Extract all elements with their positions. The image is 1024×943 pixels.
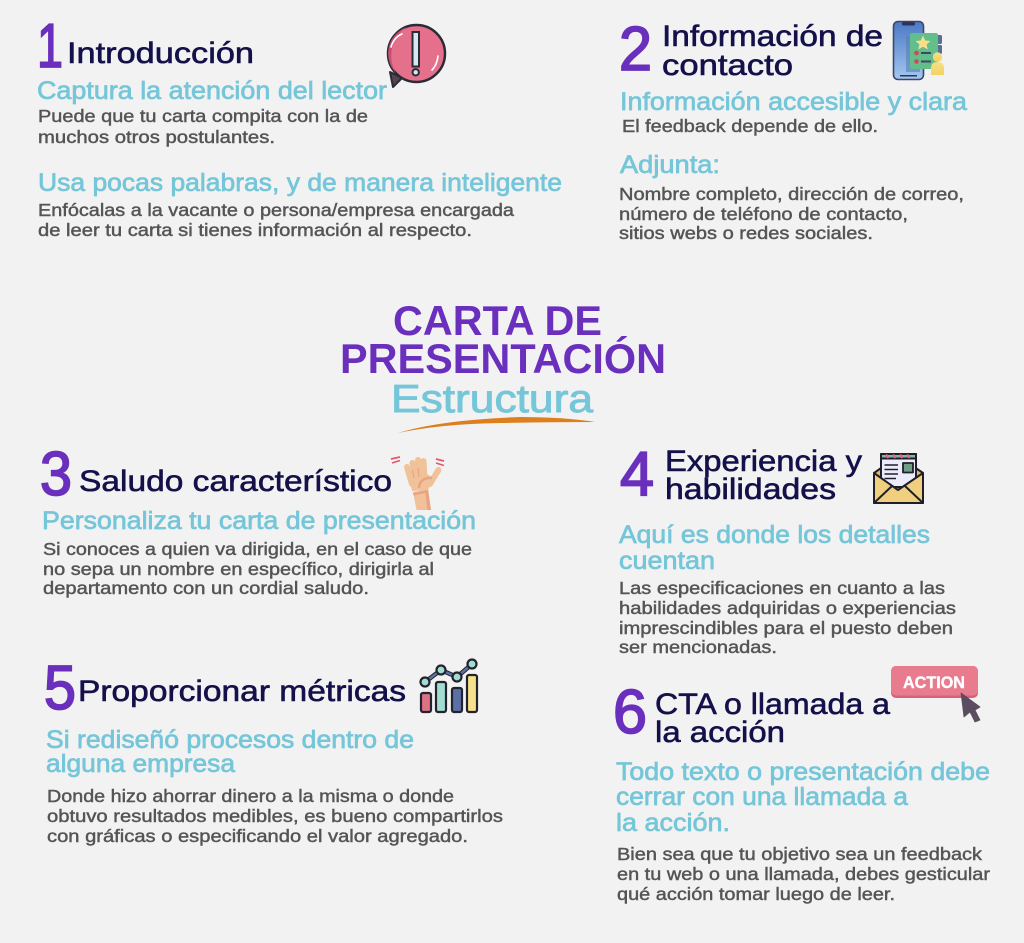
- number 4: 4: [620, 440, 654, 509]
- text block: captura: Puede que tu carta compita con la de: [38, 106, 368, 126]
- heading: información de contacto: [662, 20, 883, 82]
- panel: 3 saludo característico: [40, 440, 476, 598]
- subheading: detalles: [619, 521, 930, 575]
- heading: saludo característico: Saludo característico: [79, 465, 392, 498]
- number 3: 3: [40, 440, 72, 509]
- icon: alert speech bubble: [388, 25, 445, 87]
- text block: resultados: con gráficas o especificando el valor agregado.: [47, 826, 468, 846]
- subheading: captura la atención: Captura la atención del lector: [37, 77, 387, 105]
- orange swoosh: [398, 417, 595, 433]
- panel: 1 introducción: [37, 12, 562, 240]
- text block: captura: [38, 106, 368, 147]
- subheading: todo texto: [616, 758, 990, 837]
- text block: saludo: [43, 539, 472, 598]
- title: carta de presentación: PRESENTACIÓN: [340, 334, 666, 382]
- icon: open envelope: [874, 454, 923, 503]
- heading: cta: [655, 688, 890, 749]
- heading: experiencia y habilidades: habilidades: [665, 473, 836, 506]
- icon: bar and line chart: [420, 660, 477, 712]
- text block: datos de contacto: [619, 184, 964, 243]
- text block: enfócalas: Enfócalas a la vacante o persona/empresa encargada: [38, 200, 514, 220]
- text block: objetivo: qué acción tomar luego de leer.: [617, 884, 895, 904]
- heading: información de contacto: contacto: [662, 49, 793, 82]
- text block: especificaciones: ser mencionadas.: [619, 637, 777, 657]
- text block: resultados: [47, 786, 503, 846]
- text block: saludo: no sepa un nombre en específico, dirigirla al: [43, 559, 434, 579]
- number 2: 2: [619, 15, 652, 84]
- title block: [340, 297, 666, 433]
- subtitle: estructura: Estructura: [391, 378, 593, 421]
- icon: action button with cursor: ACTION: [903, 673, 965, 692]
- subheading: usa pocas palabras: Usa pocas palabras, y de manera inteligente: [38, 169, 562, 197]
- text block: especificaciones: habilidades adquiridas o experiencias: [619, 598, 956, 618]
- subheading: todo texto: cerrar con una llamada a: [616, 783, 908, 811]
- number 5: 5: [44, 654, 76, 723]
- subheading: detalles: Aquí es donde los detalles: [619, 521, 930, 549]
- text block: especificaciones: [619, 578, 956, 657]
- subheading: información accesible: Información accesible y clara: [620, 88, 967, 116]
- text block: saludo: Si conoces a quien va dirigida, en el caso de que: [43, 539, 472, 559]
- text block: objetivo: [617, 844, 990, 904]
- subheading: si rediseñó: alguna empresa: [46, 750, 235, 778]
- text block: datos de contacto: número de teléfono de contacto,: [619, 204, 908, 224]
- heading: cta: la acción: [655, 716, 785, 749]
- text block: objetivo: Bien sea que tu objetivo sea un feedback: [617, 844, 982, 864]
- panel: 5 proporcionar métricas: [44, 654, 503, 846]
- number 6: 6: [613, 678, 647, 747]
- subheading: todo texto: Todo texto o presentación debe: [616, 758, 990, 786]
- panel: 4 experiencia y habilidades: [619, 440, 956, 657]
- text block: especificaciones: Las especificaciones en cuanto a las: [619, 578, 945, 598]
- heading: información de contacto: Información de: [662, 20, 883, 53]
- text block: captura: muchos otros postulantes.: [38, 127, 275, 147]
- icon: phone with contact card: [894, 22, 944, 80]
- text block: resultados: Donde hizo ahorrar dinero a la misma o donde: [47, 786, 454, 806]
- text block: objetivo: en tu web o una llamada, debes gesticular: [617, 864, 990, 884]
- icon: action button with cursor: [891, 666, 980, 722]
- heading: cta: CTA o llamada a: [655, 688, 890, 721]
- number 1: 1: [37, 12, 63, 81]
- heading: proporcionar métricas: Proporcionar métricas: [78, 675, 406, 708]
- text block: especificaciones: imprescindibles para el puesto deben: [619, 618, 953, 638]
- heading: introducción: Introducción: [67, 37, 254, 70]
- text block: enfócalas: [38, 200, 514, 240]
- subheading: detalles: cuentan: [619, 547, 715, 575]
- text block: feedback: El feedback depende de ello.: [622, 116, 878, 136]
- subheading: personaliza: Personaliza tu carta de presentación: [42, 507, 476, 535]
- text block: datos de contacto: sitios webs o redes sociales.: [619, 223, 873, 243]
- heading: experiencia y habilidades: [665, 445, 862, 506]
- subheading: adjunta: Adjunta:: [620, 151, 720, 179]
- title: carta de presentación: [340, 297, 666, 382]
- text block: datos de contacto: Nombre completo, dirección de correo,: [619, 184, 964, 204]
- text block: enfócalas: de leer tu carta si tienes información al respecto.: [38, 220, 472, 240]
- text block: resultados: obtuvo resultados medibles, es bueno compartirlos: [47, 806, 503, 826]
- subheading: si rediseñó: [46, 726, 414, 778]
- text block: saludo: departamento con un cordial saludo.: [43, 578, 369, 598]
- subheading: todo texto: la acción.: [616, 809, 730, 837]
- panel: 6 cta o llamada a la acción: [613, 666, 990, 904]
- heading: experiencia y habilidades: Experiencia y: [665, 445, 862, 478]
- subheading: si rediseñó: Si rediseñó procesos dentro de: [46, 726, 414, 754]
- icon: waving hand: [391, 457, 444, 510]
- panel: 2 información de contacto: [619, 15, 967, 243]
- title: carta de presentación: CARTA DE: [393, 297, 602, 344]
